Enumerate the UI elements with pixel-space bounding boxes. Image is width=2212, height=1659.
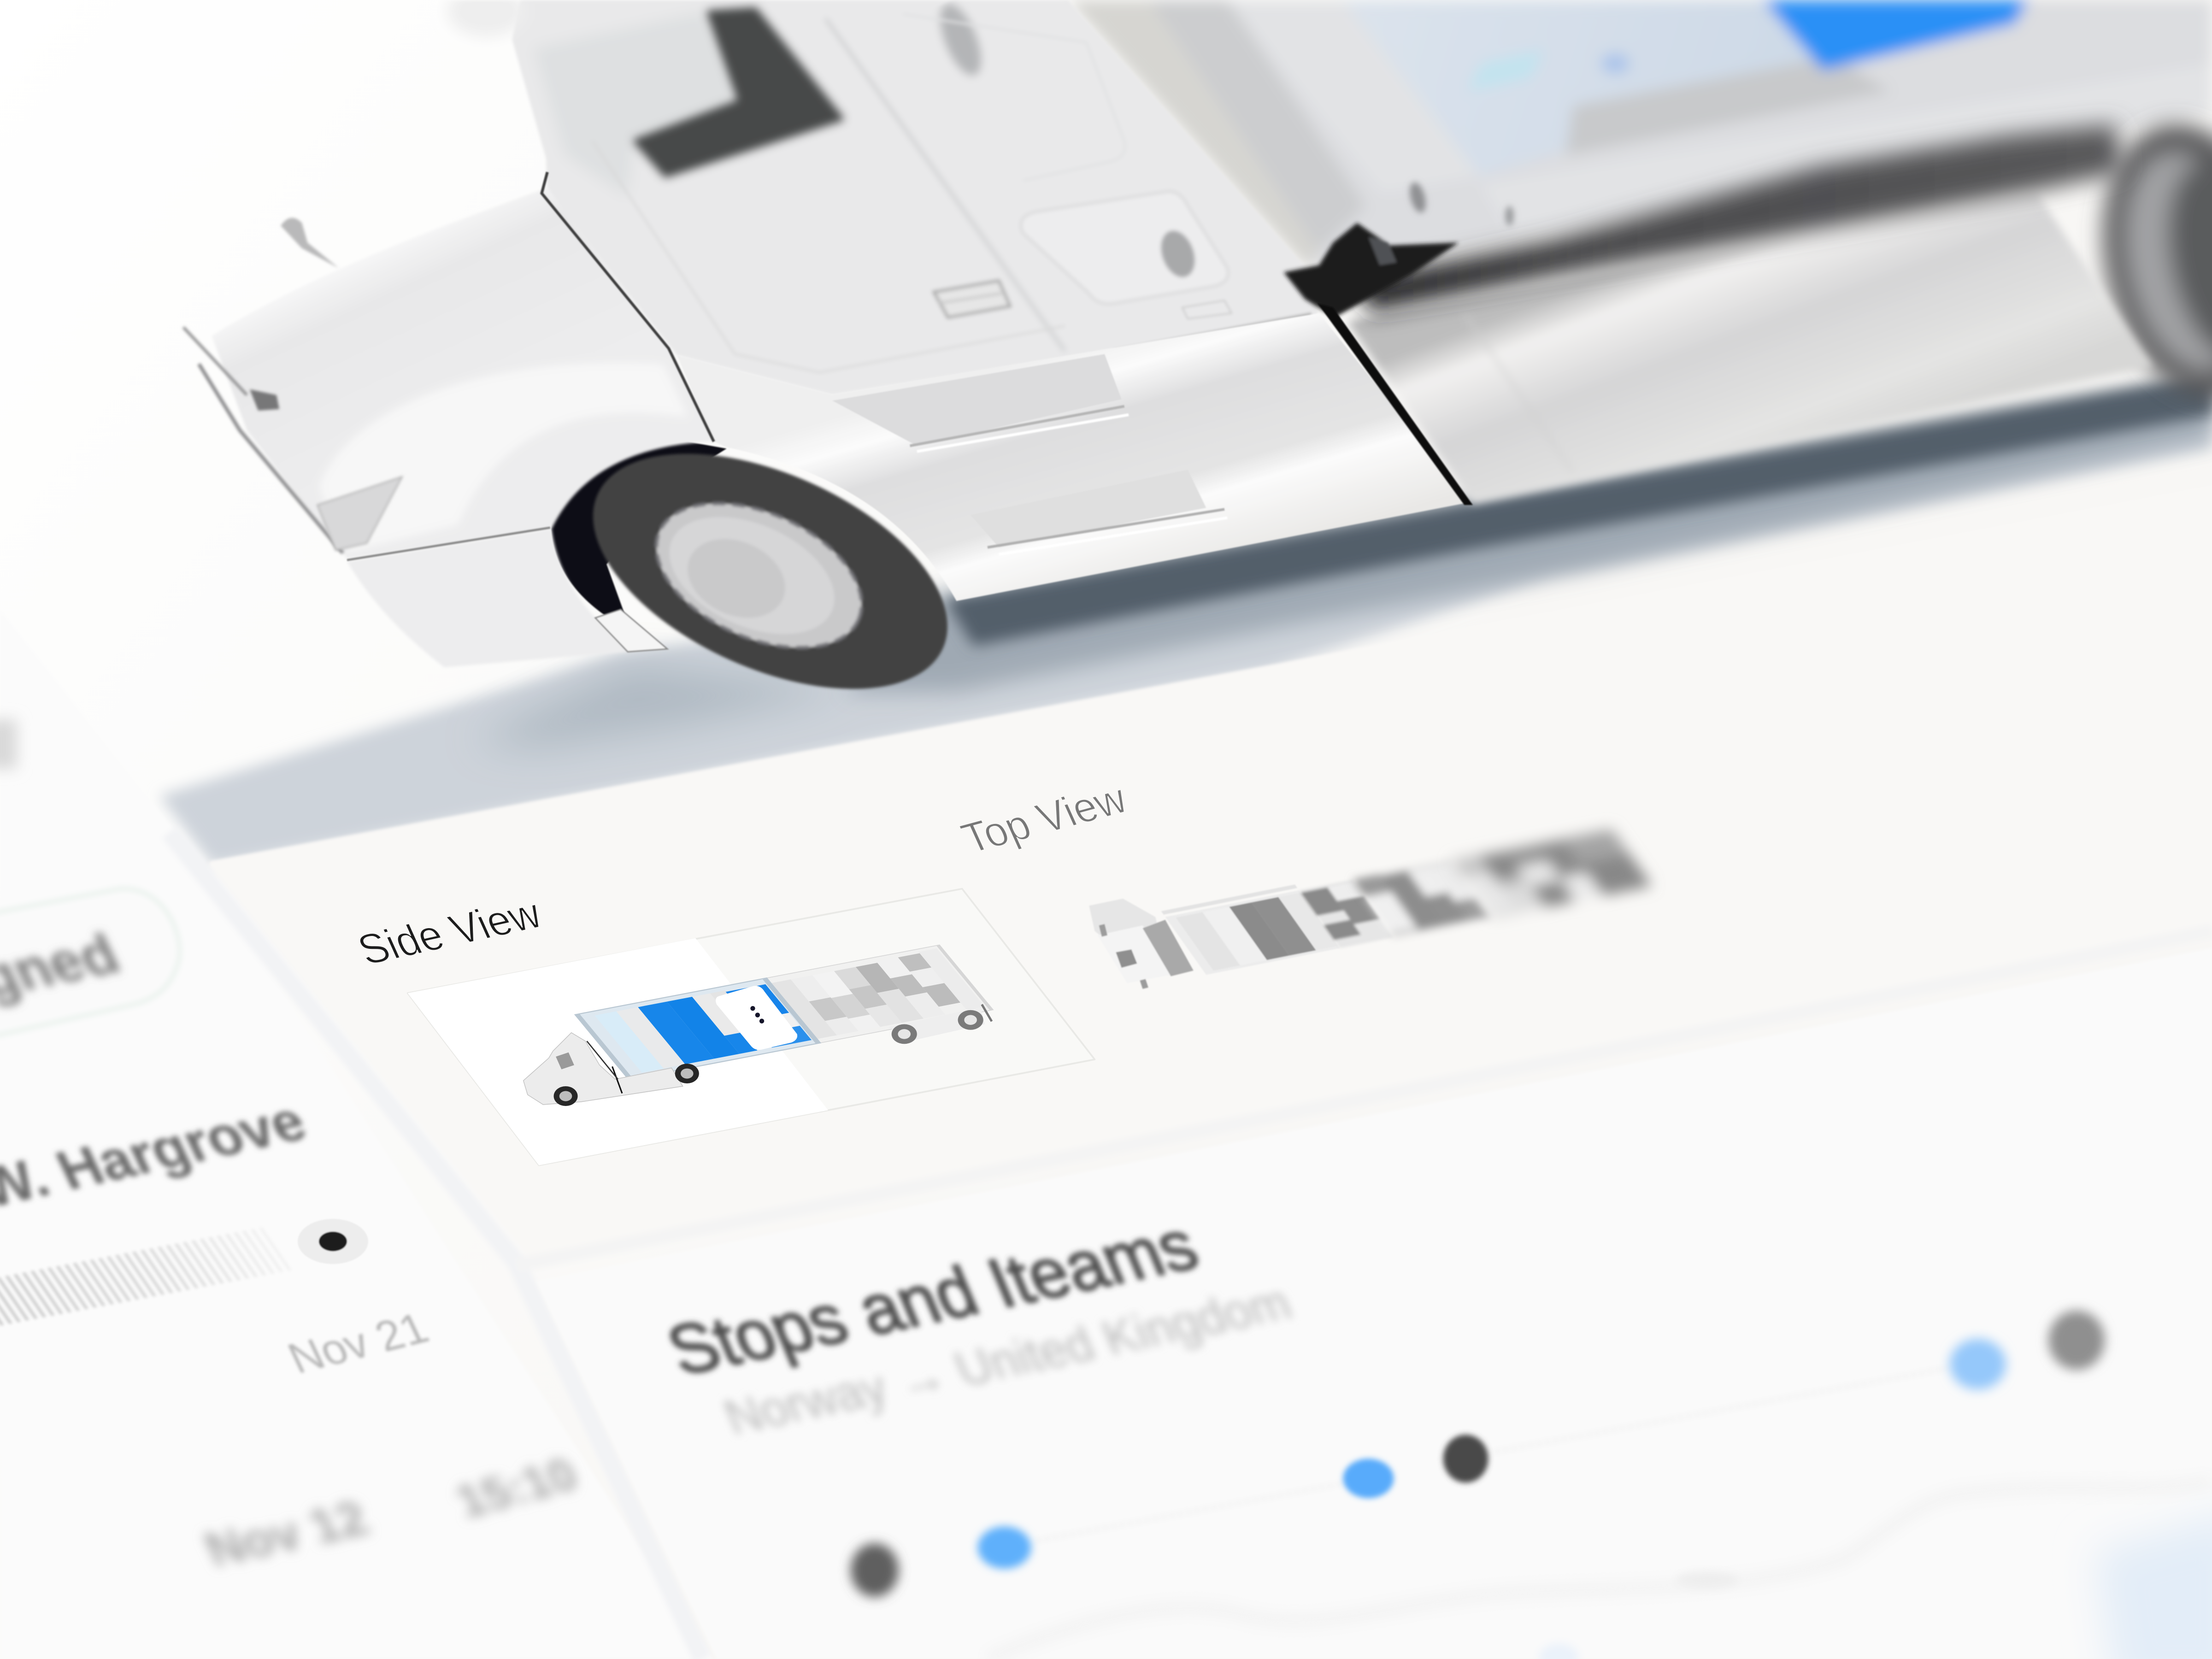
hub centre <box>675 524 798 633</box>
status pill <box>0 888 180 1041</box>
map land outlines <box>988 1481 2212 1659</box>
small truck: cab <box>524 1033 699 1106</box>
truck black chassis joint <box>1284 181 1514 318</box>
icon: headlight <box>318 477 402 550</box>
sidebar content <box>0 888 586 1577</box>
icon: side mirror <box>636 10 841 175</box>
hub ring <box>635 475 883 677</box>
top view cab <box>1089 899 1194 989</box>
pin: mid stop <box>1443 1435 1488 1483</box>
truck fuel tank <box>1347 193 2153 504</box>
mud flap <box>595 609 667 652</box>
door handle top <box>932 0 989 81</box>
truck hood seam <box>542 172 714 441</box>
truck ground shadow <box>159 374 2212 866</box>
pin: origin <box>851 1543 899 1597</box>
truck black seam <box>1318 303 1473 505</box>
truck side skirt <box>677 313 1470 601</box>
progress hatching <box>0 1248 282 1309</box>
pin: destination <box>2048 1311 2105 1370</box>
wheel arch <box>551 441 727 630</box>
small truck: blue cargo half <box>577 978 818 1079</box>
top view trailer far cells <box>1451 828 1652 918</box>
card white half <box>408 938 828 1165</box>
map water <box>2095 1510 2212 1659</box>
card: side view slider <box>408 889 1095 1165</box>
heading: top view: Top View <box>955 775 1135 862</box>
truck trailer and rear <box>1068 0 2212 268</box>
truck hood <box>212 188 714 559</box>
truck rear wheel <box>2079 107 2212 414</box>
front wheel <box>558 406 982 737</box>
door outline <box>825 18 1065 351</box>
route subtitle: Norway → United Kingdom <box>716 1275 1299 1445</box>
truck cab <box>447 0 1319 395</box>
hub disc <box>651 494 853 658</box>
upper compartment outline <box>903 14 1125 181</box>
icon: hood mirror <box>281 218 339 268</box>
date value: Nov 12 <box>195 1491 377 1577</box>
pin: destination item <box>1950 1339 2006 1389</box>
panel: sidebar <box>0 609 712 1659</box>
panel: stops and items <box>516 931 2212 1659</box>
storage door handle <box>1155 226 1201 282</box>
small truck: rear wheels <box>889 1005 992 1044</box>
map <box>988 1481 2212 1659</box>
top view trailer mid cells <box>1299 880 1394 948</box>
map water small <box>1539 1643 1579 1659</box>
truck hood left edge <box>199 364 343 553</box>
pin: origin item <box>977 1526 1031 1569</box>
truck <box>183 0 2212 737</box>
card outline <box>408 889 1095 1165</box>
route lines <box>1037 1368 1947 1541</box>
truck bumper <box>347 529 628 667</box>
tyre <box>558 406 982 737</box>
top view trailer near cells <box>1161 884 1340 975</box>
door step handle <box>934 281 1010 318</box>
heading: stops and items: Stops and Iteams <box>656 1206 1209 1390</box>
truck chassis strip <box>1357 124 2123 313</box>
progress dot <box>298 1219 368 1264</box>
route stop markers <box>851 1311 2105 1597</box>
top view truck <box>1089 828 1652 989</box>
panel: truck views <box>213 489 2212 1255</box>
small truck: gray trailer half <box>577 945 992 1079</box>
slider handle <box>716 986 797 1050</box>
date label: Nov 21 <box>281 1304 436 1382</box>
heading: side view: Side View <box>350 889 549 974</box>
storage door <box>1021 191 1228 304</box>
pin: mid item <box>1343 1459 1394 1498</box>
map faint marker <box>1676 1571 1738 1588</box>
icon: antenna <box>183 327 279 411</box>
bumper line <box>347 528 550 560</box>
top view trailer blurred cells <box>1353 860 1491 937</box>
time value: 15:10 <box>447 1448 586 1527</box>
